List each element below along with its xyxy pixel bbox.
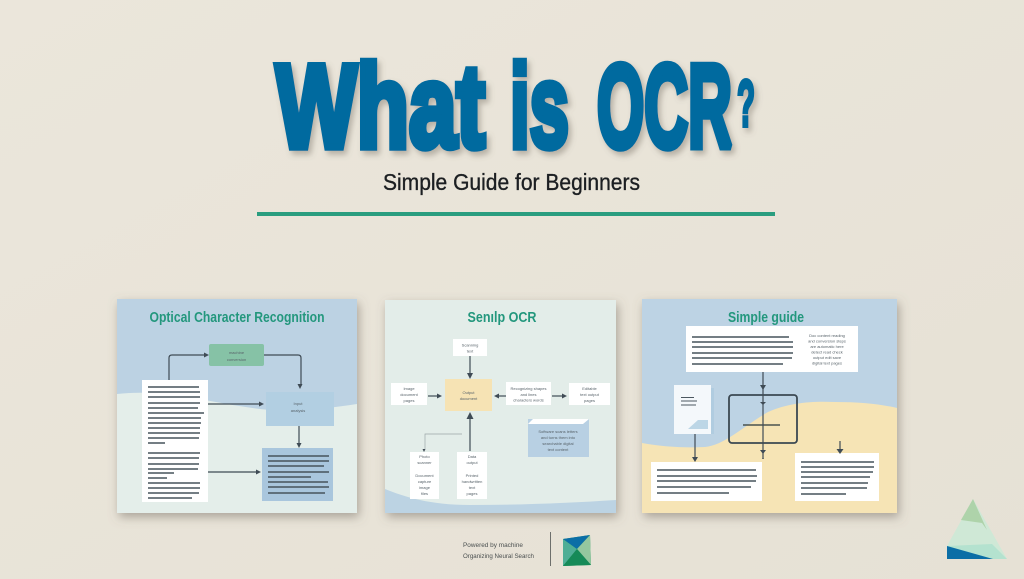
document icon bbox=[674, 385, 714, 434]
top input box: text bbox=[467, 348, 474, 354]
top text card: output edit save bbox=[813, 355, 842, 360]
top text card: Doc content reading bbox=[809, 333, 845, 338]
top text card bbox=[686, 326, 858, 372]
arrows: process flow bbox=[169, 352, 302, 474]
left input box: document bbox=[400, 392, 419, 397]
arrows: process flow bbox=[422, 356, 567, 452]
title: OCR bbox=[597, 41, 732, 173]
middle right box: characters words bbox=[513, 398, 544, 402]
middle right box: Recognizing shapes bbox=[510, 386, 547, 391]
blue process box: Input bbox=[294, 401, 303, 406]
lower left box: Photo bbox=[419, 454, 431, 459]
lower left box: capture bbox=[418, 479, 432, 484]
blue process box bbox=[266, 392, 334, 426]
central process box: Output bbox=[462, 390, 475, 395]
source document bbox=[142, 380, 208, 502]
footer text: Organizing Neural Search bbox=[463, 553, 534, 560]
green process box: conversion bbox=[227, 357, 246, 362]
footer text bbox=[463, 542, 534, 560]
far right box bbox=[569, 383, 610, 405]
far right box: text output bbox=[580, 392, 600, 397]
footer divider bbox=[550, 532, 551, 566]
lower middle box: Data bbox=[468, 454, 477, 459]
green process box: machine bbox=[229, 350, 245, 355]
bottom right text card bbox=[795, 453, 879, 501]
lower middle box: output bbox=[466, 460, 478, 465]
outlined process frame bbox=[729, 395, 797, 443]
top text card: detect read check bbox=[811, 350, 843, 354]
output text box bbox=[262, 448, 333, 501]
left input box bbox=[391, 383, 427, 405]
far right box: Editable bbox=[582, 386, 597, 391]
title bbox=[276, 41, 755, 173]
blue note: text content bbox=[548, 447, 569, 452]
panel heading: optical character recognition: Optical Character Recognition bbox=[150, 310, 324, 326]
icon: corner triangle bbox=[947, 499, 1007, 559]
panel: simple guide bbox=[642, 299, 897, 513]
panel heading: simple guide: Simple guide bbox=[728, 310, 804, 326]
lower middle box: Printed bbox=[466, 473, 478, 478]
middle right box bbox=[506, 382, 551, 405]
panel heading: simple OCR: Senılp OCR bbox=[468, 310, 537, 326]
heading rule bbox=[257, 212, 775, 216]
lower left box: image bbox=[419, 485, 431, 490]
panel: simple OCR bbox=[385, 300, 616, 513]
left input box: pages bbox=[404, 398, 414, 403]
blue note: searchable digital bbox=[542, 441, 574, 446]
lower left box: files bbox=[421, 491, 428, 496]
far right box: pages bbox=[584, 398, 595, 403]
lower middle box: handwritten bbox=[462, 479, 482, 484]
top text card: digital text pages bbox=[812, 360, 842, 366]
text: ? bbox=[737, 66, 755, 140]
blue process box: analysis bbox=[291, 408, 305, 413]
lower middle box: text bbox=[469, 485, 476, 490]
subtitle: Simple Guide for Beginners bbox=[383, 169, 640, 195]
lower left box: Document bbox=[415, 473, 435, 478]
lower left box: scanner bbox=[417, 460, 432, 465]
top input box bbox=[453, 339, 487, 356]
blue note: and turns them into bbox=[541, 435, 576, 440]
bottom left text card bbox=[651, 462, 762, 501]
arrows: process flow bbox=[692, 372, 844, 462]
lower middle box: pages bbox=[467, 491, 477, 496]
top text card: and conversion steps bbox=[808, 338, 846, 344]
blue note: Software scans letters bbox=[538, 429, 578, 434]
central process box bbox=[445, 379, 492, 411]
top text card: are automatic here bbox=[810, 344, 844, 349]
title: is bbox=[510, 41, 569, 173]
panel: optical character recognition bbox=[117, 299, 357, 513]
central process box: document bbox=[460, 396, 478, 401]
footer text: Powered by machine bbox=[463, 542, 523, 549]
title: What bbox=[276, 41, 485, 173]
left input box: Image bbox=[403, 386, 415, 391]
icon: footer logo bbox=[563, 535, 591, 566]
top input box: Scanning bbox=[462, 342, 478, 348]
middle right box: and lines bbox=[520, 392, 537, 397]
blue note bbox=[528, 419, 589, 457]
lower middle box bbox=[457, 452, 487, 499]
green process box bbox=[209, 344, 264, 366]
lower left box bbox=[410, 452, 439, 499]
